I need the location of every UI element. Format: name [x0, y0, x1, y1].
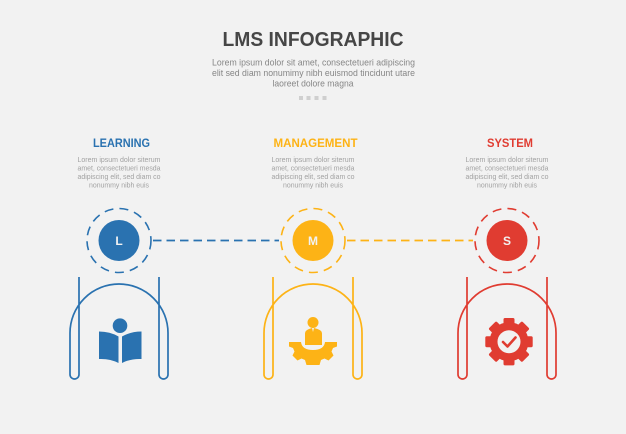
text: management: amet, consectetueri mesda	[272, 164, 355, 172]
heading: learning: LEARNING	[93, 136, 150, 150]
icon: manager on gear	[289, 317, 337, 365]
marker: L	[87, 208, 151, 272]
panel: system	[458, 136, 556, 379]
marker: M: M	[308, 234, 318, 248]
text: management: Lorem ipsum dolor siterum	[272, 155, 354, 164]
marker: S: S	[503, 234, 511, 248]
text: learning: amet, consectetueri mesda	[78, 164, 161, 172]
text: learning: adipiscing elit, sed diam co	[78, 172, 160, 181]
intro text block: laoreet dolore magna	[272, 78, 354, 88]
marker: S	[475, 208, 539, 272]
arch frame	[458, 277, 556, 379]
panel: learning	[70, 136, 168, 379]
text: system: nonummy nibh euis	[477, 180, 537, 190]
text: system	[466, 155, 549, 190]
title dots	[299, 96, 326, 100]
arch frame	[70, 277, 168, 379]
arch frame	[264, 277, 362, 379]
text: system: Lorem ipsum dolor siterum	[466, 155, 548, 164]
intro text block	[212, 58, 415, 88]
title: LMS INFOGRAPHIC	[222, 28, 404, 51]
marker: M	[281, 208, 345, 272]
text: learning	[78, 155, 161, 190]
heading: management: MANAGEMENT	[274, 136, 358, 150]
text: learning: Lorem ipsum dolor siterum	[78, 155, 160, 164]
panel: management	[264, 136, 362, 379]
icon: gear with check	[485, 318, 533, 365]
text: system: amet, consectetueri mesda	[466, 164, 549, 172]
connector: management to system	[347, 240, 473, 242]
marker: L: L	[115, 234, 123, 248]
intro text block: elit sed diam nonumimy nibh euismod tincidunt utare	[212, 68, 415, 78]
intro text block: Lorem ipsum dolor sit amet, consectetueri adipiscing	[212, 58, 415, 68]
text: management: adipiscing elit, sed diam co	[272, 172, 354, 181]
text: system: adipiscing elit, sed diam co	[466, 172, 548, 181]
heading: system: SYSTEM	[487, 136, 533, 150]
text: management	[272, 155, 355, 190]
text: management: nonummy nibh euis	[283, 180, 343, 190]
icon: reader with book	[99, 318, 142, 363]
text: learning: nonummy nibh euis	[89, 180, 149, 190]
connector: learning to management	[153, 240, 279, 242]
